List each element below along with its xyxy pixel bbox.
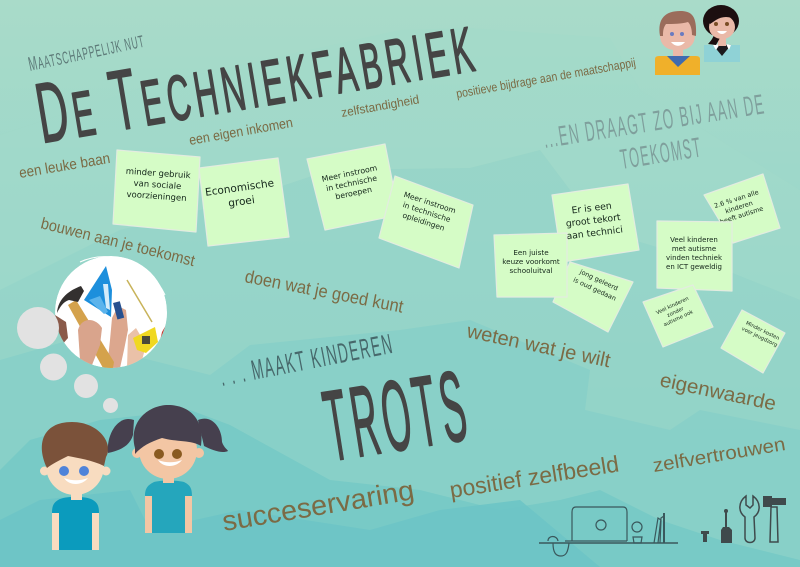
sticky note: jong geleerd: jong geleerd [578,267,619,293]
keywords: positief zelfbeeld [448,451,621,503]
sticky note: 2.6 procent: 2.6 % van alle [713,188,760,210]
icon: wrench [740,496,759,542]
icon: girl [108,405,228,533]
sticky note: meer instroom opleidingen [379,176,473,268]
sticky note: minder gebruik: van sociale [133,179,182,192]
sticky note: jong geleerd: is oud gedaan [572,276,617,303]
sticky note: minder kosten: voor jeugdzorg [741,326,778,349]
icon: desk with laptop [539,507,678,556]
sticky note: economische groei [199,158,289,246]
sticky note: 2.6 procent: kinderen [724,199,754,215]
sticky note: kinderen zonder autisme: autisme ook [663,309,694,328]
icon: screwdriver [721,509,732,543]
sticky note: tekort aan technici: groot tekort [565,212,622,230]
sticky note: kinderen met autisme: vinden techniek [666,254,723,262]
icon: man portrait [655,11,700,75]
sticky note: meer instroom beroepen: beroepen [335,185,373,201]
sticky note: meer instroom beroepen: in technische [325,174,378,193]
sticky note: meer instroom beroepen: Meer instroom [321,163,378,184]
sticky note: minder kosten [721,310,785,373]
sticky note: minder gebruik: minder gebruik [125,167,191,181]
sticky note: jong geleerd [553,262,633,332]
keywords: eigenwaarde [658,369,778,415]
subheading: maatschappelijk nut: MAATSCHAPPELIJK NUT [26,30,146,76]
sticky note: minder gebruik: voorzieningen [126,190,187,204]
sticky note: kinderen met autisme: Veel kinderen [670,236,718,244]
sticky note: minder kosten: Minder kosten [745,320,780,342]
sticky note: tekort aan technici [552,184,639,262]
keywords: bouwen aan je toekomst [39,215,197,270]
sticky note: tekort aan technici: Er is een [571,201,612,216]
sticky note: juiste keuze: Een juiste [513,248,549,257]
sticky note: economische groei: groei [228,194,256,210]
keywords: doen wat je goed kunt [243,266,405,317]
sticky note: juiste keuze: keuze voorkomt [502,257,560,266]
keywords: weten wat je wilt [464,320,613,372]
keywords: een eigen inkomen [188,114,294,148]
sticky note: kinderen met autisme: en ICT geweldig [666,263,722,271]
icon: screw [701,531,709,542]
sticky note: meer instroom beroepen [307,144,399,230]
icon: woman portrait [703,5,740,62]
subheading: en draagt zo bij aan de toekomst [541,88,767,175]
sticky note: kinderen met autisme [657,221,732,291]
sticky note: juiste keuze [494,233,567,297]
sticky note: kinderen zonder autisme: Veel kinderen [655,296,690,316]
keywords: een leuke baan [18,150,111,182]
sticky note: 2.6 procent: heeft autisme [719,204,764,226]
photo: hands holding tools [52,256,170,368]
sticky note: tekort aan technici: aan technici [566,224,624,242]
sticky note: meer instroom opleidingen: Meer instroom [403,190,457,215]
sticky note: minder gebruik [113,150,200,232]
keywords: succeservaring [220,474,416,537]
subheading: en draagt zo bij aan de toekomst: TOEKOMST [618,131,704,175]
keywords: positieve bijdrage aan de maatschappij [455,56,637,101]
sticky note: kinderen met autisme: met autisme [672,245,716,253]
subheading: maakt kinderen: . . . MAAKT KINDEREN [217,328,396,392]
sticky note: 2.6 procent [704,174,780,243]
sticky note: meer instroom opleidingen: in technische [402,200,452,224]
sticky note: meer instroom opleidingen: opleidingen [401,211,446,233]
sticky note: juiste keuze: schooluitval [509,266,553,275]
sticky note: kinderen zonder autisme [643,285,713,347]
keywords: zelfstandigheid [340,92,420,120]
sticky note: economische groei: Economische [204,177,275,199]
icon: hammer [763,496,786,542]
keywords: zelfvertrouwen [651,434,787,477]
sticky note: kinderen zonder autisme: zonder [666,306,686,319]
icon: boy [40,422,110,550]
text: TROTS [317,349,478,483]
thought bubbles [17,307,118,413]
